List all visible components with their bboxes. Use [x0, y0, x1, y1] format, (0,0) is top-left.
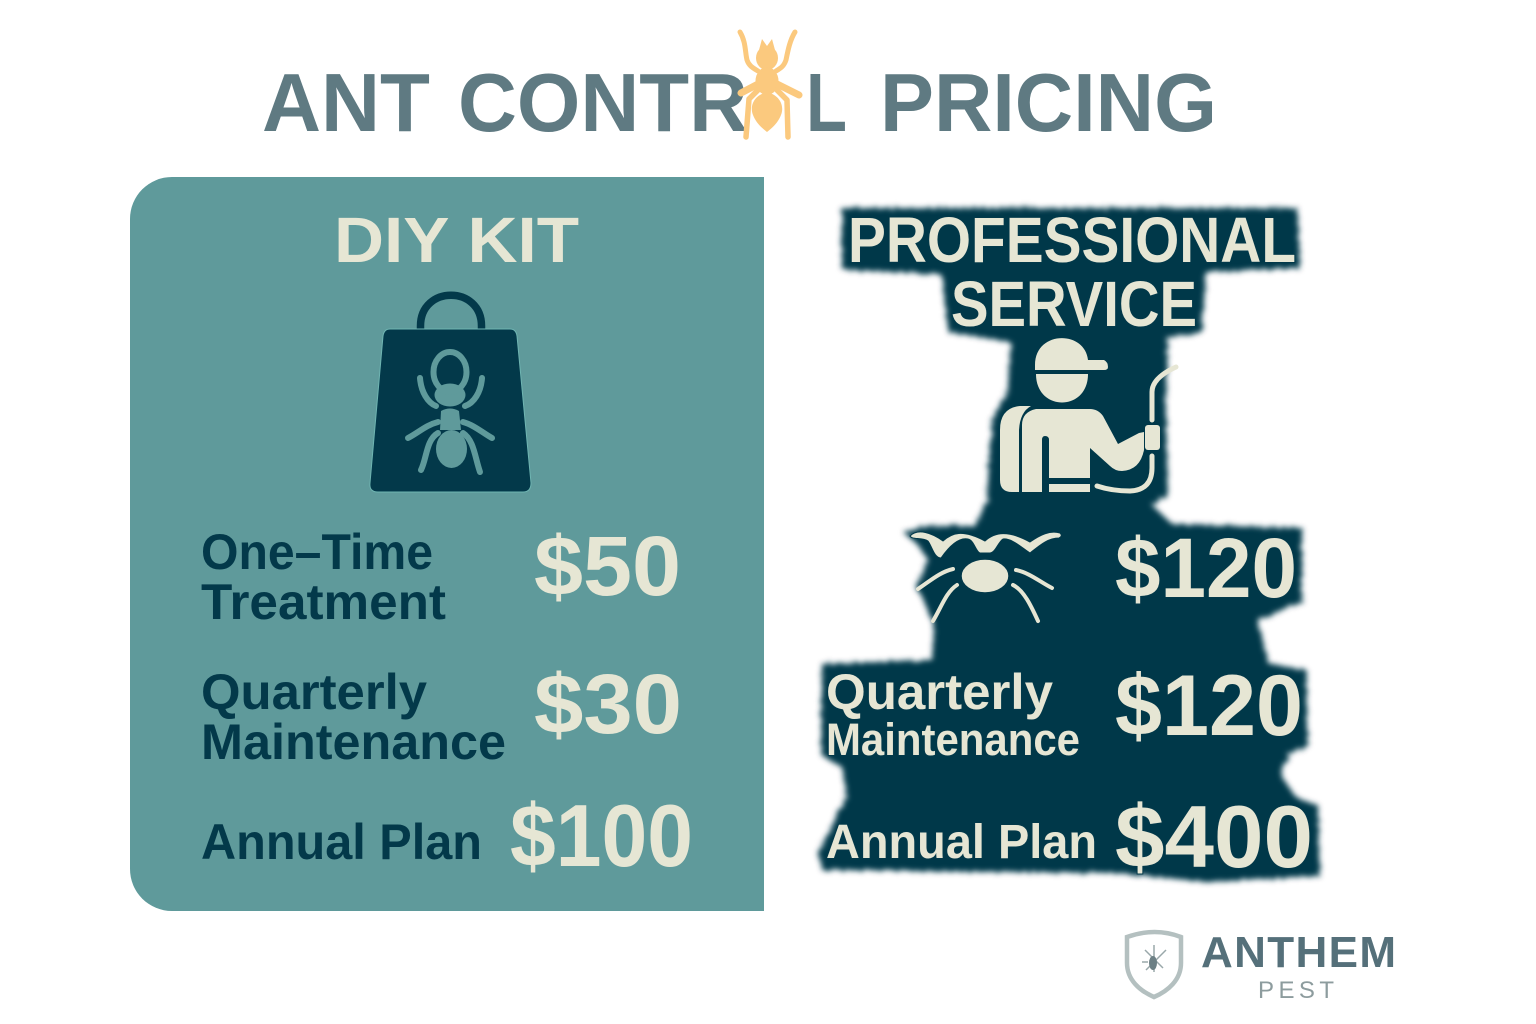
tagline: PEST [1258, 977, 1334, 1004]
title: ANT [262, 56, 430, 149]
row: annual plan: Annual Plan [201, 814, 482, 870]
heading: professional service [848, 204, 1296, 340]
row: quarterly maintenance: Quarterly [826, 664, 1053, 720]
row: quarterly maintenance [826, 658, 1303, 765]
logo: Anthem Pest [1127, 928, 1396, 1004]
row: one-time treatment: $50 [534, 519, 681, 613]
row: annual plan [201, 786, 693, 885]
row: quarterly maintenance: $30 [534, 657, 682, 751]
dark rough background [818, 208, 1320, 882]
icon: technician with sprayer [1000, 338, 1176, 492]
row: quarterly maintenance [201, 657, 682, 770]
title: L [806, 56, 847, 149]
row: quarterly maintenance: $120 [1115, 658, 1303, 754]
title [262, 56, 1217, 149]
row: annual plan: Annual Plan [826, 816, 1097, 869]
row: one-time treatment [201, 519, 681, 630]
heading: DIY kit: DIY KIT [334, 204, 579, 276]
wordmark: ANTHEM [1201, 928, 1396, 977]
icon: shield [1127, 932, 1181, 997]
title: CONTR [458, 56, 748, 149]
icon: ant bug [910, 532, 1061, 621]
title: PRICING [880, 56, 1217, 149]
panel: professional service [818, 204, 1320, 886]
heading: professional service: SERVICE [951, 268, 1197, 340]
row: annual plan: $400 [1115, 787, 1313, 886]
row: quarterly maintenance: Maintenance [201, 714, 506, 770]
icon: shopping bag with ant [370, 295, 531, 492]
row: quarterly maintenance: Quarterly [201, 664, 427, 720]
heading: professional service: PROFESSIONAL [848, 204, 1296, 276]
row: annual plan: $100 [510, 786, 693, 885]
panel: DIY kit [130, 177, 764, 911]
icon: title ant [740, 32, 799, 137]
row: one-time price: $120 [1115, 521, 1297, 615]
row: one-time treatment: One–Time [201, 524, 433, 580]
row: one-time treatment: Treatment [201, 574, 446, 630]
row: quarterly maintenance: Maintenance [826, 714, 1080, 765]
row: annual plan [826, 787, 1313, 886]
